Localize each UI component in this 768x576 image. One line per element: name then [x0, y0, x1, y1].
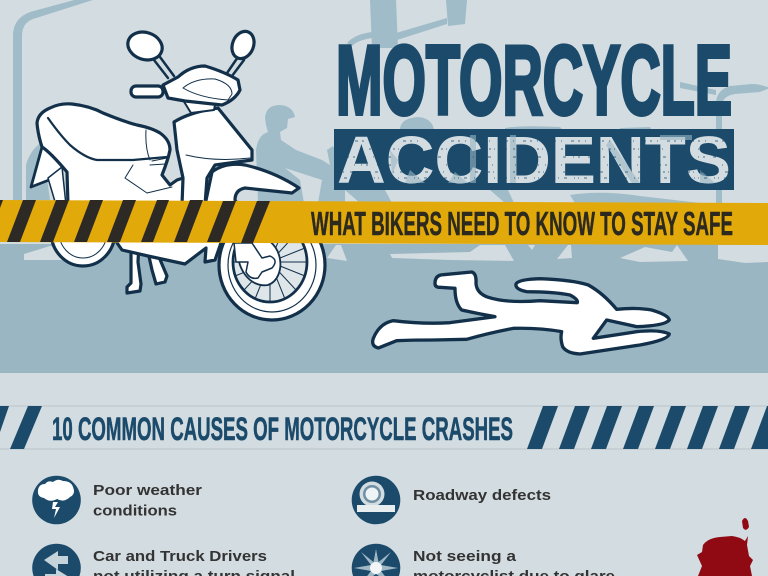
- left navy stripes: [0, 406, 42, 449]
- centre stand: [127, 243, 141, 293]
- lower section background divider lines and heading band: [0, 405, 768, 450]
- label: Poor weather: [93, 482, 202, 499]
- neck: [183, 100, 216, 113]
- rear fender: [31, 147, 66, 187]
- headlight lens: [183, 79, 232, 100]
- background street silhouettes: [13, 0, 768, 205]
- right mirror: [228, 28, 258, 62]
- chalk body outline: [373, 272, 669, 354]
- cause: poor weather: [32, 476, 202, 524]
- icon: tire on road: [352, 476, 400, 524]
- mirror stems: [154, 57, 244, 78]
- motorcycle illustration: [31, 28, 325, 320]
- left mirror: [124, 28, 166, 64]
- black tape stripes: [0, 200, 270, 243]
- icon: glare star: [352, 544, 400, 576]
- fork: [234, 243, 275, 278]
- icon: storm cloud: [32, 476, 81, 524]
- cause: roadway defects: [352, 476, 551, 524]
- label: Roadway defects: [413, 487, 551, 504]
- cause: turn signal: [32, 544, 295, 576]
- caution tape: [0, 200, 768, 245]
- cause: poor weather: conditions: [93, 502, 177, 520]
- light patches between silhouettes: [24, 245, 768, 263]
- front fender: [205, 164, 299, 205]
- title: Accidents banner: ACCIDENTS: [337, 123, 731, 198]
- right navy stripes: [527, 406, 768, 449]
- label: Car and Truck Drivers: [93, 548, 267, 565]
- road surface: [0, 244, 768, 373]
- front wheel: [219, 210, 325, 320]
- label: Not seeing a: [413, 548, 517, 565]
- handle grip: [131, 86, 163, 97]
- cause: glare: [352, 544, 615, 576]
- seat and rear body: [37, 104, 186, 205]
- rear wheel: [51, 195, 115, 266]
- leg shield: [174, 108, 252, 205]
- blood splatter: [697, 518, 753, 576]
- headlight fairing: [163, 66, 240, 105]
- hub: [238, 235, 280, 285]
- icon: arrows: [32, 544, 81, 576]
- lower body under tape: [115, 240, 222, 264]
